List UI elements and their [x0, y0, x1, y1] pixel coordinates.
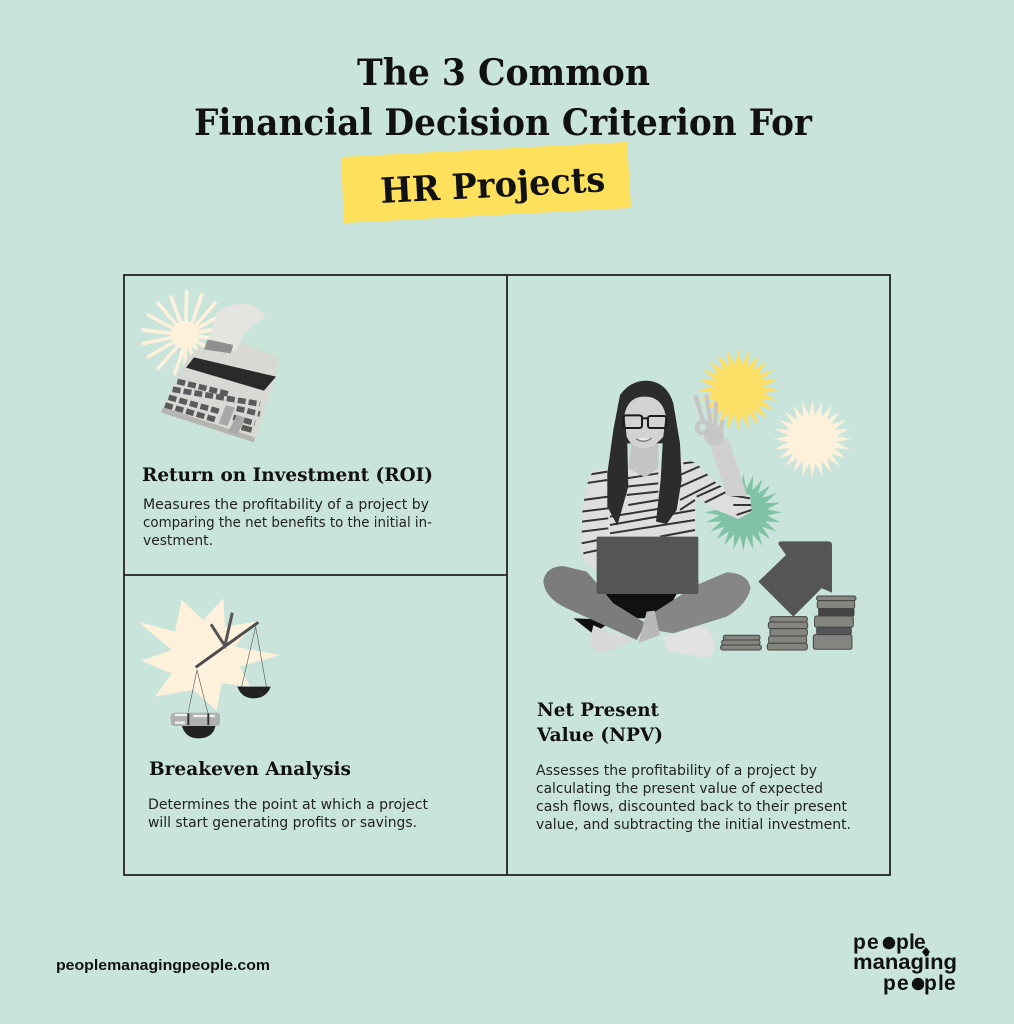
description: return on investment: vestment.: [143, 533, 213, 549]
heading: net present value: Net Present: [537, 700, 659, 721]
description: net present value: Assesses the profitability of a project by: [536, 763, 817, 779]
description: breakeven analysis: will start generating profits or savings.: [148, 815, 417, 831]
description: net present value: value, and subtracting the initial investment.: [536, 817, 851, 833]
description: breakeven analysis: [148, 797, 428, 831]
logo: people managing people: [853, 931, 957, 995]
heading: net present value: [536, 700, 663, 746]
description: net present value: cash flows, discounted back to their present: [536, 799, 847, 815]
description: net present value: calculating the present value of expected: [536, 781, 823, 797]
panel: breakeven analysis: [138, 598, 428, 831]
title: The 3 Common: [357, 52, 650, 94]
description: return on investment: comparing the net benefits to the initial in-: [143, 515, 432, 531]
highlighted heading: HR Projects: [341, 142, 631, 223]
icon: cream burst: [773, 400, 852, 478]
logo: people managing people: managing: [853, 951, 957, 974]
title: [194, 52, 813, 144]
illustration: woman with laptop, coins and arrow: [543, 349, 856, 657]
description: net present value: [536, 763, 851, 833]
icon: yellow burst: [697, 349, 780, 431]
comparison grid: [124, 275, 890, 875]
panel: net present value: [536, 349, 856, 833]
icon: coin stacks: [721, 596, 856, 650]
woman: [543, 381, 752, 657]
heading: net present value: Value (NPV): [536, 725, 663, 746]
title: Financial Decision Criterion For: [194, 102, 813, 144]
description: return on investment: [143, 497, 432, 549]
logo: people managing people: people: [853, 931, 926, 954]
description: breakeven analysis: Determines the point at which a project: [148, 797, 428, 813]
icon: balance scale on star: [138, 598, 280, 738]
logo: people managing people: people: [883, 972, 956, 995]
footer website: peoplemanagingpeople.com: [56, 958, 270, 974]
heading: return on investment: Return on Investment (ROI): [142, 465, 433, 486]
heading: breakeven analysis: Breakeven Analysis: [149, 759, 351, 780]
icon: calculator with sun rays: [143, 292, 278, 442]
panel: return on investment: [142, 292, 433, 549]
icon: arrow: [758, 541, 832, 617]
description: return on investment: Measures the profitability of a project by: [143, 497, 429, 513]
highlighted heading: HR Projects: HR Projects: [379, 159, 606, 212]
icon: green burst: [704, 473, 782, 551]
